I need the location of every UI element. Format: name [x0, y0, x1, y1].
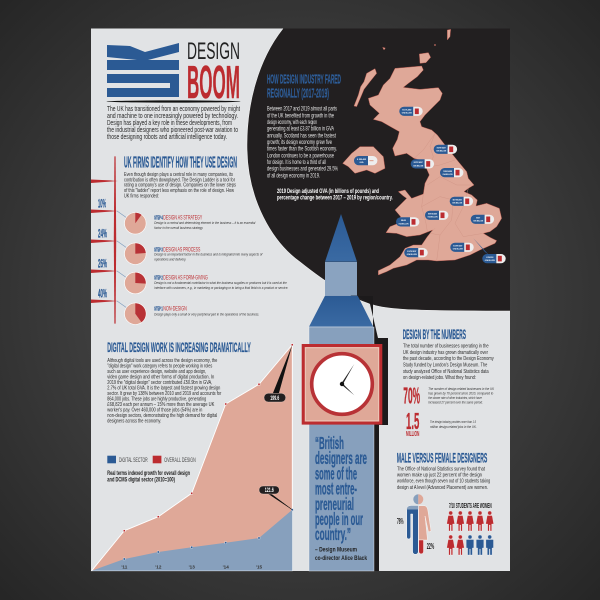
intro text: those designing robots and artificial intelligence today. — [107, 132, 227, 141]
year axis labels: '13 — [189, 564, 195, 570]
map of the UK — [343, 29, 506, 275]
logo letters UK — [107, 43, 179, 97]
spire — [325, 214, 357, 262]
chart legend — [107, 456, 196, 464]
badge: West Midlands — [425, 211, 448, 220]
panel: male versus female designers — [396, 449, 494, 555]
callout: overall design value — [264, 345, 292, 402]
title word: DESIGN: DESIGN — [187, 38, 240, 65]
map caption — [277, 188, 393, 202]
badge: London — [482, 254, 506, 263]
panel: regional performance text — [267, 72, 341, 179]
quote: preneurial — [315, 494, 354, 514]
badge: East Midlands — [450, 197, 473, 206]
quote — [315, 433, 367, 562]
infographic canvas: HOW DESIGN INDUSTRY FARED — [267, 72, 341, 86]
intro text: the industrial designers who pioneered post-war aviation to — [107, 125, 238, 134]
tower shadow — [357, 296, 388, 571]
gender body text: design at A level (Advanced Placement) are women. — [397, 485, 488, 491]
ladder intro text: rating a company's use of design. Companies on the lower steps — [124, 183, 236, 189]
title: UK Design Boom — [106, 38, 240, 108]
map caption: 2019 Design adjusted GVA (in billions of pounds) and — [277, 188, 379, 195]
regional body text: of all design economy in 2019. — [267, 172, 320, 179]
numbers body text: on design-related jobs. What they found: — [403, 375, 476, 381]
gender body text: women make up just 22 percent of the design — [396, 472, 482, 478]
ladder rails — [91, 156, 118, 324]
step 3 text — [154, 247, 263, 262]
badge: North East: GVA BILLION — [436, 150, 447, 153]
map caption: percentage change between 2017 – 2019 by region/country. — [277, 194, 393, 202]
intro text: Design has played a key role in these developments, from — [107, 118, 232, 127]
step 3 text: Design is an important factor in the business and is integrated into many aspects of — [154, 252, 263, 257]
badge: London: GVA BILLION — [485, 259, 495, 262]
badge: South East — [450, 243, 474, 252]
badge: North West: GVA BILLION — [413, 164, 424, 167]
London leader line — [473, 238, 489, 255]
badge: East Midlands: EAST MIDLANDS — [453, 198, 462, 201]
regional body text: for design. It is home to a third of all — [267, 159, 326, 166]
ladder intro text: UK firms responded: — [124, 193, 159, 199]
step 3 text: DESIGN AS PROCESS — [163, 247, 200, 253]
ladder intro text: Even though design plays a central role in many companies, its — [124, 172, 233, 178]
regional body text — [267, 106, 338, 179]
digital design body text: 2019 the "digital design" sector contributed £50.9bn in GVA, — [107, 380, 213, 386]
icon: half male half female figure — [407, 494, 431, 554]
clock face — [303, 346, 381, 423]
infographic canvas: 7/10 STUDENTS ARE WOMEN — [449, 503, 492, 510]
heading: regional — [267, 72, 341, 100]
title underline swoosh — [106, 100, 240, 103]
stat: 70 percent: increased 27 percent over the same period. — [428, 400, 483, 405]
panel: UK firms design ladder: 40% — [98, 288, 107, 300]
digital design body text — [107, 358, 221, 424]
digital design body text: Although digital tools are used across the design economy, the — [107, 358, 217, 364]
regional body text: design economy, with each region — [267, 119, 317, 126]
step 1 text: Design plays only a small or very peripheral part in the operations of the business. — [154, 311, 259, 316]
numbers body text: study analyzed Office of National Statistics data — [403, 369, 489, 375]
quote: some of the — [315, 464, 357, 484]
stat: 70 percent: 70% — [403, 382, 420, 408]
numbers body text: The total number of businesses operating in the — [403, 344, 489, 350]
panel: UK firms design ladder: 26% — [98, 258, 107, 270]
year axis labels: '15 — [256, 564, 263, 570]
dark map backdrop — [247, 28, 510, 311]
stat: 1.5 million: million design-related jobs in the UK. — [430, 424, 477, 429]
badge: East of England — [471, 215, 494, 224]
infographic canvas: UK FIRMS IDENTIFY HOW THEY USE DESIGN — [124, 154, 237, 172]
stat: 70 percent — [403, 382, 494, 408]
regional body text: of the UK benefited from growth in the — [267, 112, 334, 119]
numbers body text: Study funded by London's Design Museum. The — [403, 362, 487, 368]
step 2 text: interface with customers, e.g., in marketing or packaging or to bring a final finish to a product or service. — [154, 285, 288, 290]
pie: 26 percent — [124, 272, 146, 294]
panel: design by the numbers — [403, 327, 494, 438]
badge: North West: NORTH WEST — [414, 162, 423, 164]
regional body text: design businesses and generated 29.5% — [267, 166, 338, 173]
digital design body text: sector. It grew by 138% between 2010 and 2019 and accounts for — [107, 391, 221, 397]
badge: East of England: EAST — [476, 216, 481, 219]
quote: “British — [315, 433, 344, 453]
badge: North West — [411, 159, 434, 168]
regional body text: growth; its design economy grew five — [267, 139, 332, 146]
intro text — [107, 104, 241, 141]
step 1 text: NON-DESIGN — [163, 306, 187, 312]
badge: South West — [404, 248, 428, 257]
pictogram: students — [447, 511, 494, 555]
badge: London: LONDON — [486, 257, 494, 259]
badge: Yorkshire: GVA BILLION — [442, 173, 453, 176]
Big Ben clock tower: designers are — [315, 448, 367, 468]
callout: digital sector value — [259, 486, 292, 510]
percentage labels — [98, 198, 107, 300]
tower shaft — [309, 327, 374, 571]
badge: Northern Ireland: N. IRELAND — [357, 158, 366, 161]
regional body text: Between 2017 and 2019 almost all parts — [267, 106, 337, 113]
year axis labels: '12 — [155, 564, 162, 570]
infographic canvas: BOOM — [187, 56, 240, 108]
stat: 1.5 million: The design industry provides more than 1.5 — [430, 419, 476, 424]
step 3 text: STEP 3 — [154, 247, 163, 253]
step 1 text: STEP 1 — [154, 306, 163, 312]
badge: North East: NORTH EAST — [437, 146, 446, 149]
gender body text — [396, 466, 490, 491]
badge: South West: GVA BILLION — [407, 253, 417, 256]
digital sector area — [92, 510, 292, 571]
digital design body text: £68,823 each per annum – 15% more than the average UK — [107, 402, 214, 408]
digital design body text: designers across the economy. — [107, 418, 162, 424]
badge: Scotland — [399, 107, 423, 116]
step 1 text — [154, 306, 259, 316]
chart caption — [107, 471, 190, 484]
quote: country.” — [315, 524, 351, 544]
numbers body text: UK design industry has grown dramatically over — [403, 350, 488, 356]
gender body text: The Office of National Statistics survey found that — [397, 466, 485, 472]
badge: East Midlands: GVA BILLION — [452, 202, 463, 205]
regional body text: generating at least £3.87 billion in GVA — [267, 126, 335, 133]
badge: Scotland: GVA BILLION — [402, 112, 412, 115]
quote attribution: co-director Alice Black — [315, 555, 367, 562]
year axis labels: '11 — [121, 564, 128, 570]
chart caption: and DCMS digital sector (2010=100) — [107, 478, 175, 484]
year axis labels — [121, 564, 263, 570]
step 2 text: DESIGN AS FORM-GIVING — [163, 276, 208, 282]
Big Ben clock tower — [303, 214, 388, 571]
badge: Yorkshire: YORKSHIRE — [443, 171, 453, 173]
badge: Yorkshire — [440, 168, 463, 177]
lower roof — [309, 296, 373, 327]
quote attribution: – Design Museum — [315, 546, 357, 554]
badge: West Midlands: WEST MIDLANDS — [428, 212, 437, 215]
regional body text: times faster than the Scottish economy. — [267, 146, 337, 153]
intro text: and machine to one increasingly powered by technology. — [107, 111, 238, 120]
year axis labels: '14 — [223, 564, 229, 570]
digital design body text: such as user experience design, website and app design, — [107, 369, 207, 375]
panel: male versus female designers: 78% — [397, 516, 404, 526]
panel: UK firms design ladder — [91, 154, 288, 325]
digital design body text: non-design sectors, demonstrating the high demand for digital — [107, 413, 217, 419]
badge: North East — [434, 145, 457, 154]
pie: 40 percent — [124, 303, 146, 325]
overall design area — [92, 345, 292, 571]
digital design body text: worker's pay. Over 460,000 of those jobs (54%) are in — [107, 407, 202, 413]
numbers body text — [403, 344, 494, 381]
overall design markers — [123, 344, 293, 532]
badge: Northern Ireland: GVA — [360, 161, 364, 164]
digital design body text: "digital design" work category refers to people working in roles — [107, 364, 212, 370]
pie: 10 percent — [124, 212, 146, 234]
badge: Scotland: SCOTLAND — [402, 108, 412, 111]
ladder intro text: of this "ladder" report less emphasis on the role of design. How — [124, 188, 235, 194]
badge: South East: GVA BILLION — [453, 248, 463, 251]
step 4 text — [154, 215, 255, 230]
infographic canvas: DIGITAL DESIGN WORK IS INCREASING DRAMATICALLY — [107, 339, 251, 355]
badge: Wales — [396, 217, 419, 226]
step 4 text: Design is a central and determining element in the business – it is an essential — [154, 220, 255, 225]
regional body text: London continues to be a powerhouse — [267, 152, 334, 159]
step 2 text: Design is not a fundamental contributor to what the business supplies or produces but it is used at the — [154, 280, 287, 285]
badge: East of England: GVA BILLION — [473, 220, 484, 223]
badge: West Midlands: GVA BILLION — [428, 216, 438, 219]
panel: male versus female designers: 22% — [427, 541, 434, 551]
badge: Wales: WALES — [401, 219, 406, 222]
chart legend: OVERALL DESIGN — [164, 458, 196, 464]
step 3 text: operations and delivery. — [154, 257, 186, 262]
infographic canvas: REGIONALLY (2017-2019) — [267, 86, 329, 100]
badge: Wales: GVA BILLION — [398, 222, 409, 225]
badge: South East: SOUTH EAST — [453, 244, 463, 247]
map landmasses — [343, 29, 502, 275]
step 4 text: factor in the overall business strategy. — [154, 225, 203, 230]
callout: digital sector value: 121.6 — [265, 488, 274, 494]
ladder intro text — [124, 172, 236, 199]
intro text: The UK has transitioned from an economy powered by might — [107, 104, 241, 113]
stat: 70 percent: The number of design-related businesses in the UK — [428, 386, 494, 391]
digital design body text: 2.7% of UK total GVA. It is the largest and fastest growing design — [107, 386, 220, 392]
area chart — [92, 344, 293, 571]
callout: overall design value: 199.6 — [270, 396, 280, 402]
Big Ben clock tower: people in our — [315, 509, 363, 529]
stat: 70 percent: has grown by 70 percent since 2010, compared to — [428, 390, 494, 395]
quote attribution — [315, 546, 367, 562]
badge: Northern Ireland — [354, 156, 377, 165]
gender body text: workforce, even though seven out of 10 students taking — [396, 479, 490, 485]
stat: 1.5 million — [406, 408, 477, 438]
ladder intro text: contribution is often downplayed. The Design Ladder is a tool for — [124, 177, 235, 183]
connector lines — [117, 211, 127, 308]
step 4 text: STEP 4 — [154, 215, 163, 221]
chart legend: DIGITAL SECTOR — [119, 458, 148, 464]
panel: digital design chart section — [92, 339, 293, 571]
panel: design by the numbers: DESIGN BY THE NUMBERS — [403, 327, 466, 342]
digital design body text: video game design and other forms of digital production. In — [107, 374, 214, 380]
badge: South West: SOUTH WEST — [407, 251, 417, 253]
stat: 1.5 million: MILLION — [406, 429, 419, 438]
pie: 24 percent — [124, 243, 146, 264]
panel: UK firms design ladder: 10% — [98, 198, 106, 210]
stat: 1.5 million: 1.5 — [406, 408, 419, 434]
numbers body text: the past decade, according to the Design Economy — [403, 356, 494, 362]
belfry — [325, 262, 357, 296]
digital design body text: 864,000 jobs. These jobs are highly productive, generating — [107, 396, 206, 402]
panel: UK firms design ladder: 24% — [98, 228, 107, 240]
regional body text: annually. Scotland has seen the fastest — [267, 132, 336, 139]
quote: most entre- — [315, 478, 357, 498]
chart caption: Real terms indexed growth for overall design — [107, 471, 190, 477]
step 2 text: STEP 2 — [154, 276, 163, 282]
step 2 text — [154, 276, 288, 290]
stat: 70 percent: the slower rate of other industries, which have — [428, 395, 482, 400]
step 4 text: DESIGN AS STRATEGY — [163, 215, 202, 221]
digital sector markers — [123, 509, 293, 560]
